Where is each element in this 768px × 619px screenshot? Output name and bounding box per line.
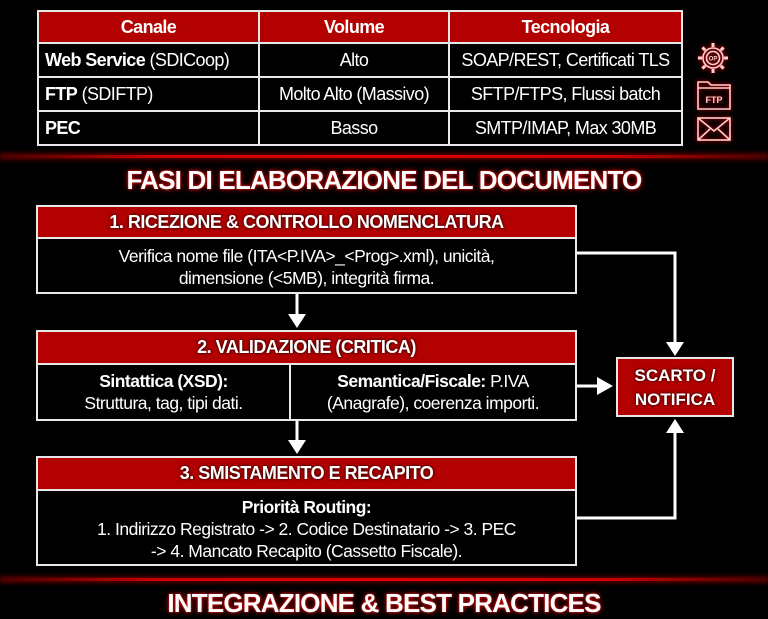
title: integrazione: INTEGRAZIONE & BEST PRACTICES xyxy=(167,588,601,618)
box 1: ricezione: dimensione (<5MB), integrità firma. xyxy=(179,268,434,288)
arrow: box1 to box2 xyxy=(288,294,306,328)
table: canali: SMTP/IMAP, Max 30MB xyxy=(475,118,656,138)
box 2: validazione xyxy=(36,330,577,421)
table: canali: Basso xyxy=(330,118,378,138)
table: canali: SOAP/REST, Certificati TLS xyxy=(461,50,670,70)
table: canali: FTP (SDIFTP) xyxy=(45,84,153,104)
arrow: box1 to scarto xyxy=(577,253,684,356)
arrow: box2 to box3 xyxy=(288,421,306,454)
table: canali xyxy=(37,10,683,146)
table: canali: PEC xyxy=(45,118,80,138)
box 2: validazione: Sintattica (XSD): xyxy=(99,371,228,391)
box 2: validazione: Semantica/Fiscale: P.IVA xyxy=(337,371,529,391)
box 1: ricezione: Verifica nome file (ITA<P.IVA>_<Prog>.xml), unicità, xyxy=(119,246,494,266)
icons column xyxy=(694,40,734,144)
table: canali: Web Service (SDICoop) xyxy=(45,50,229,70)
table: canali: SFTP/FTPS, Flussi batch xyxy=(471,84,660,104)
box 3: smistamento: -> 4. Mancato Recapito (Cassetto Fiscale). xyxy=(151,541,462,561)
table: canali: Canale xyxy=(121,16,176,36)
box 3: smistamento: 1. Indirizzo Registrato -> 2. Codice Destinatario -> 3. PEC xyxy=(97,519,516,539)
table: canali: Molto Alto (Massivo) xyxy=(279,84,429,104)
box 2: validazione: (Anagrafe), coerenza importi. xyxy=(327,393,539,413)
box: scarto / notifica: SCARTO / xyxy=(635,366,715,385)
icon: ftp folder: FTP xyxy=(706,95,722,105)
icon: envelope xyxy=(698,118,730,140)
box 2: validazione: 2. VALIDAZIONE (CRITICA) xyxy=(197,337,416,357)
box 2: validazione: Struttura, tag, tipi dati. xyxy=(84,393,243,413)
table: canali: Alto xyxy=(340,50,368,70)
box 1: ricezione: 1. RICEZIONE & CONTROLLO NOMENCLATURA xyxy=(109,212,504,232)
arrow: box2 to scarto xyxy=(577,377,613,395)
table: canali: Volume xyxy=(324,16,384,36)
box: scarto / notifica: NOTIFICA xyxy=(635,390,715,409)
box 3: smistamento: Priorità Routing: xyxy=(242,497,371,517)
box 3: smistamento xyxy=(36,456,577,566)
box: scarto / notifica xyxy=(616,357,734,417)
title: fasi di elaborazione: FASI DI ELABORAZIONE DEL DOCUMENTO xyxy=(126,165,641,195)
icon: gear: OP xyxy=(709,56,717,62)
table: canali: Tecnologia xyxy=(522,16,609,36)
box 1: ricezione xyxy=(36,205,577,294)
box 3: smistamento: 3. SMISTAMENTO E RECAPITO xyxy=(180,463,433,483)
arrow: box3 to scarto xyxy=(577,419,684,518)
